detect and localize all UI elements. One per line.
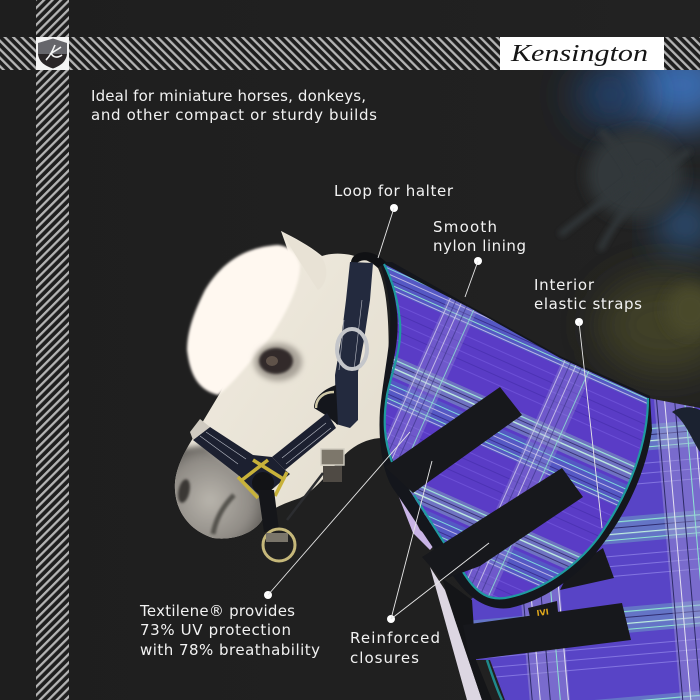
callout: smooth nylon lining: nylon lining bbox=[433, 237, 526, 255]
callout: interior elastic straps bbox=[534, 276, 642, 528]
neck and head shape bbox=[175, 231, 389, 539]
belly strap bbox=[463, 603, 631, 660]
callout: loop for halter: Loop for halter bbox=[334, 182, 454, 200]
callout: loop for halter bbox=[334, 182, 454, 258]
chin clip bbox=[266, 533, 288, 542]
IVI label tag bbox=[528, 601, 558, 618]
intro text: Ideal for miniature horses, donkeys, bbox=[91, 87, 366, 105]
side ring backing bbox=[314, 385, 338, 425]
logo: Kensington bbox=[500, 37, 664, 70]
muzzle shading bbox=[174, 442, 262, 539]
neck cover blanket bbox=[380, 262, 652, 608]
mane bbox=[187, 245, 300, 395]
nose band bbox=[193, 427, 290, 498]
cheek diagonal strap bbox=[272, 413, 336, 470]
callout: Textilene: 73% UV protection bbox=[140, 621, 291, 639]
callout: Textilene: with 78% breathability bbox=[140, 641, 320, 659]
halter bbox=[190, 252, 386, 561]
eye bbox=[259, 348, 293, 374]
callout: reinforced closures: closures bbox=[350, 649, 419, 667]
lead strap bbox=[287, 473, 323, 520]
ear bbox=[281, 231, 326, 290]
chin strap bbox=[258, 490, 279, 532]
pony body blanket bbox=[395, 398, 700, 700]
callout: smooth nylon lining bbox=[433, 218, 526, 297]
chin ring bbox=[263, 529, 295, 561]
nostril bbox=[176, 478, 192, 504]
black binding bbox=[380, 262, 652, 608]
callout: interior elastic straps: Interior bbox=[534, 276, 595, 294]
closure straps bbox=[385, 387, 631, 660]
callout: reinforced closures: Reinforced bbox=[350, 629, 440, 647]
callout: reinforced closures bbox=[350, 461, 489, 667]
silver buckle bbox=[337, 329, 367, 369]
intro text: and other compact or sturdy builds bbox=[91, 106, 377, 124]
stitching bbox=[200, 300, 362, 464]
pony head bbox=[170, 231, 389, 545]
logo: Kensington: Kensington bbox=[510, 41, 648, 67]
crown strap bbox=[335, 262, 373, 428]
callout: Textilene bbox=[139, 432, 410, 659]
intro text bbox=[91, 87, 377, 124]
blurred tree background photo bbox=[560, 43, 700, 375]
upper chest strap bbox=[385, 387, 522, 493]
lower clip bbox=[323, 466, 342, 482]
loop bbox=[351, 252, 386, 268]
plaid panel bbox=[384, 264, 648, 598]
callout: smooth nylon lining: Smooth bbox=[433, 218, 497, 236]
callout: interior elastic straps: elastic straps bbox=[534, 295, 642, 313]
IVI label tag: IVI bbox=[536, 607, 549, 618]
side clip bbox=[321, 449, 344, 465]
nose band padding bbox=[190, 419, 210, 440]
teal piping bbox=[384, 264, 648, 598]
mouth shadow bbox=[213, 495, 234, 534]
silver cheek ring bbox=[316, 392, 334, 408]
strap behind collar bbox=[560, 548, 614, 590]
eye shading bbox=[254, 343, 302, 381]
callout: Textilene: Textilene® provides bbox=[139, 602, 295, 620]
icon: K shield logo bbox=[36, 37, 69, 70]
lower chest strap bbox=[422, 468, 583, 580]
gold X ring bbox=[238, 460, 287, 498]
